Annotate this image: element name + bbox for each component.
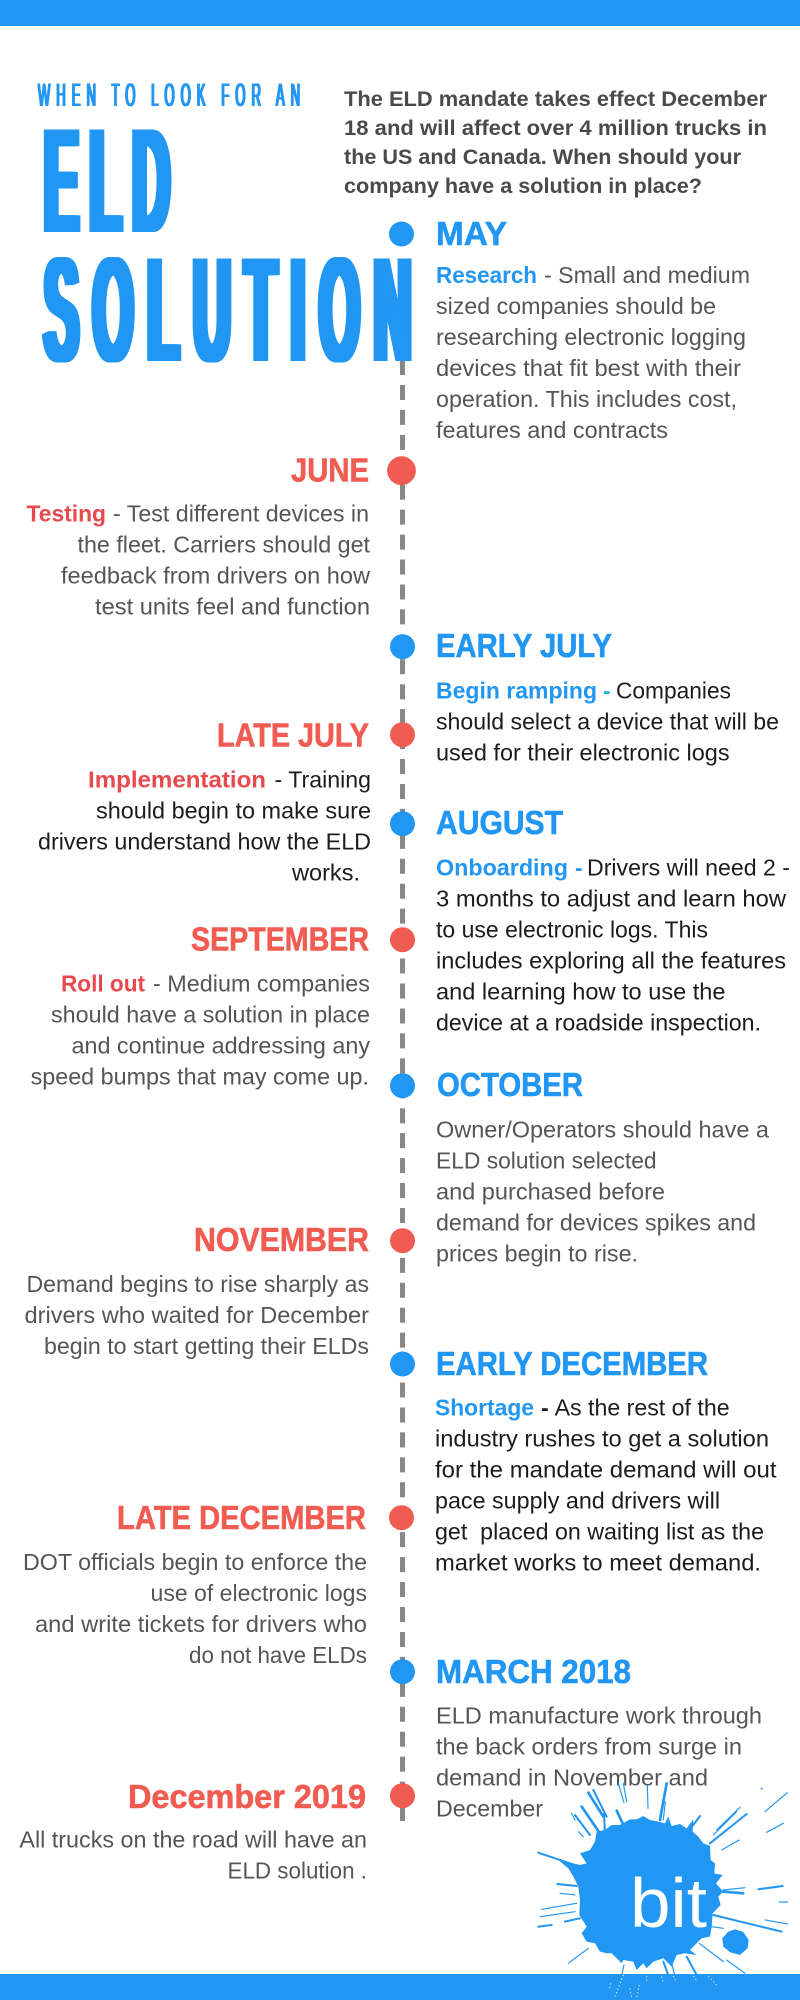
text: March 2018: demand in November and	[436, 1765, 708, 1791]
text: May: - Small and medium	[544, 262, 750, 288]
text: October: demand for devices spikes and	[436, 1210, 756, 1236]
text: Early December: As the rest of the	[555, 1395, 730, 1421]
text: August: Drivers will need 2 -	[587, 855, 790, 881]
dot: March 2018	[390, 1659, 415, 1684]
text: May: features and contracts	[436, 417, 668, 443]
panel: May	[389, 215, 750, 443]
text: November: Demand begins to rise sharply as	[26, 1271, 369, 1297]
text: August: Onboarding	[436, 855, 568, 881]
panel: October	[390, 1066, 769, 1267]
text: May: operation. This includes cost,	[436, 386, 737, 412]
text: December 2019: All trucks on the road will have an	[19, 1827, 367, 1853]
heading: Late December: LATE DECEMBER	[117, 1499, 366, 1536]
dot: Early July	[390, 634, 415, 659]
text: August: to use electronic logs. This	[436, 917, 708, 943]
panel: March 2018	[390, 1653, 762, 1822]
text: Early December	[435, 1395, 777, 1576]
text: Early December: pace supply and drivers will	[435, 1488, 720, 1514]
bottom bar	[0, 1974, 800, 2000]
heading: December 2019: December 2019	[128, 1778, 366, 1815]
text: March 2018: ELD manufacture work through	[436, 1703, 762, 1729]
panel: Early July	[390, 627, 779, 766]
intro text: the US and Canada. When should your	[344, 145, 742, 169]
text: Late December: use of electronic logs	[150, 1580, 367, 1606]
heading: October: OCTOBER	[437, 1066, 583, 1103]
text: September: should have a solution in place	[51, 1002, 370, 1028]
title line: when to look for an: WHEN TO LOOK FOR AN	[38, 77, 306, 113]
text: September: Roll out	[61, 971, 145, 997]
text: March 2018	[436, 1703, 762, 1822]
intro text: The ELD mandate takes effect December	[344, 87, 768, 111]
text: May: sized companies should be	[436, 293, 716, 319]
panel: June	[26, 452, 416, 620]
text: Early December: -	[541, 1395, 549, 1421]
logo: bit paint splat	[538, 1783, 788, 1998]
dot: August	[390, 811, 415, 836]
heading: Early December: EARLY DECEMBER	[436, 1345, 708, 1382]
heading: Early July: EARLY JULY	[436, 627, 612, 664]
heading: September: SEPTEMBER	[191, 921, 369, 958]
panel: December 2019	[19, 1778, 415, 1884]
heading: November: NOVEMBER	[194, 1221, 369, 1258]
dot: Early December	[390, 1352, 415, 1376]
text: Early December: Shortage	[435, 1395, 534, 1421]
text: September: and continue addressing any	[72, 1033, 371, 1059]
text: Early July: -	[603, 678, 611, 704]
title line: ELD: ELD	[44, 97, 181, 264]
text: Late July: drivers understand how the ELD	[38, 829, 371, 855]
dot: September	[390, 927, 415, 952]
text: September: - Medium companies	[153, 971, 370, 997]
text: October: and purchased before	[436, 1179, 665, 1205]
text: March 2018: the back orders from surge in	[436, 1734, 742, 1760]
dot: Late December	[389, 1505, 414, 1530]
text: August: device at a roadside inspection.	[436, 1010, 761, 1036]
text: Late December: do not have ELDs	[189, 1642, 367, 1668]
intro text: company have a solution in place?	[344, 174, 702, 198]
text: Early July: should select a device that will be	[436, 709, 779, 735]
text: Late July: works.	[291, 860, 360, 886]
white specks over bottom bar	[609, 1975, 717, 1998]
text: May: researching electronic logging	[436, 324, 746, 350]
panel: August	[390, 804, 790, 1036]
text: March 2018: December	[436, 1796, 543, 1822]
text: Late July	[38, 767, 371, 886]
panel: Late July	[38, 717, 415, 886]
text: October: ELD solution selected	[436, 1148, 657, 1174]
top bar	[0, 0, 800, 26]
text: August: includes exploring all the features	[436, 948, 786, 974]
text: Early July: Begin ramping	[436, 678, 597, 704]
text: November: drivers who waited for December	[24, 1302, 369, 1328]
text: October: prices begin to rise.	[436, 1241, 638, 1267]
heading: June: JUNE	[291, 452, 369, 489]
text: Early July: used for their electronic logs	[436, 740, 730, 766]
panel: November	[24, 1221, 415, 1359]
heading: Late July: LATE JULY	[217, 717, 369, 754]
text: Early December: industry rushes to get a solution	[435, 1426, 769, 1452]
text: June: - Test different devices in	[113, 501, 369, 527]
text: June: feedback from drivers on how	[61, 563, 370, 589]
text: November	[24, 1271, 369, 1359]
text: Early July: Companies	[616, 678, 731, 704]
text: Late December: and write tickets for drivers who	[35, 1611, 367, 1637]
text: May	[436, 262, 750, 443]
dot: December 2019	[390, 1783, 415, 1808]
intro text	[344, 87, 768, 198]
text: Late December	[23, 1549, 367, 1668]
text: June	[26, 501, 371, 620]
heading: May: MAY	[436, 215, 507, 252]
dot: November	[390, 1228, 415, 1253]
dot: May	[389, 222, 414, 246]
dot: June	[387, 456, 416, 485]
panel: Late December	[23, 1499, 414, 1668]
text: September: speed bumps that may come up.	[31, 1064, 369, 1090]
panel: Early December	[390, 1345, 777, 1576]
text: Late July: Implementation	[88, 767, 266, 793]
panel: September	[31, 921, 415, 1090]
title line: SOLUTION: SOLUTION	[44, 226, 425, 393]
text: May: Research	[436, 262, 537, 288]
text: June: Testing	[26, 501, 106, 527]
text: Early December: get placed on waiting list as the	[435, 1519, 764, 1545]
text: June: test units feel and function	[95, 594, 370, 620]
text: August: and learning how to use the	[436, 979, 726, 1005]
title	[37, 77, 425, 393]
text: December 2019: ELD solution .	[228, 1858, 367, 1884]
logo text: bit: bit	[630, 1864, 707, 1942]
text: Late July: should begin to make sure	[96, 798, 371, 824]
text: October: Owner/Operators should have a	[436, 1117, 769, 1143]
heading: March 2018: MARCH 2018	[436, 1653, 631, 1690]
heading: August: AUGUST	[436, 804, 563, 841]
text: June: the fleet. Carriers should get	[78, 532, 371, 558]
dot: October	[390, 1073, 415, 1098]
timeline dashed line	[400, 360, 405, 1821]
text: May: devices that fit best with their	[436, 355, 741, 381]
text: August: -	[575, 855, 583, 881]
text: Late July: - Training	[274, 767, 371, 793]
text: Early December: for the mandate demand will out	[435, 1457, 777, 1483]
text: Early July	[436, 678, 779, 766]
text: November: begin to start getting their ELDs	[44, 1333, 369, 1359]
text: August: 3 months to adjust and learn how	[436, 886, 786, 912]
text: December 2019	[19, 1827, 367, 1884]
text: September	[31, 971, 371, 1090]
text: October	[436, 1117, 769, 1267]
dot: Late July	[390, 722, 415, 747]
text: Early December: market works to meet demand.	[435, 1550, 761, 1576]
text: Late December: DOT officials begin to enforce the	[23, 1549, 367, 1575]
text: August	[436, 855, 790, 1036]
intro text: 18 and will affect over 4 million trucks in	[344, 116, 767, 140]
